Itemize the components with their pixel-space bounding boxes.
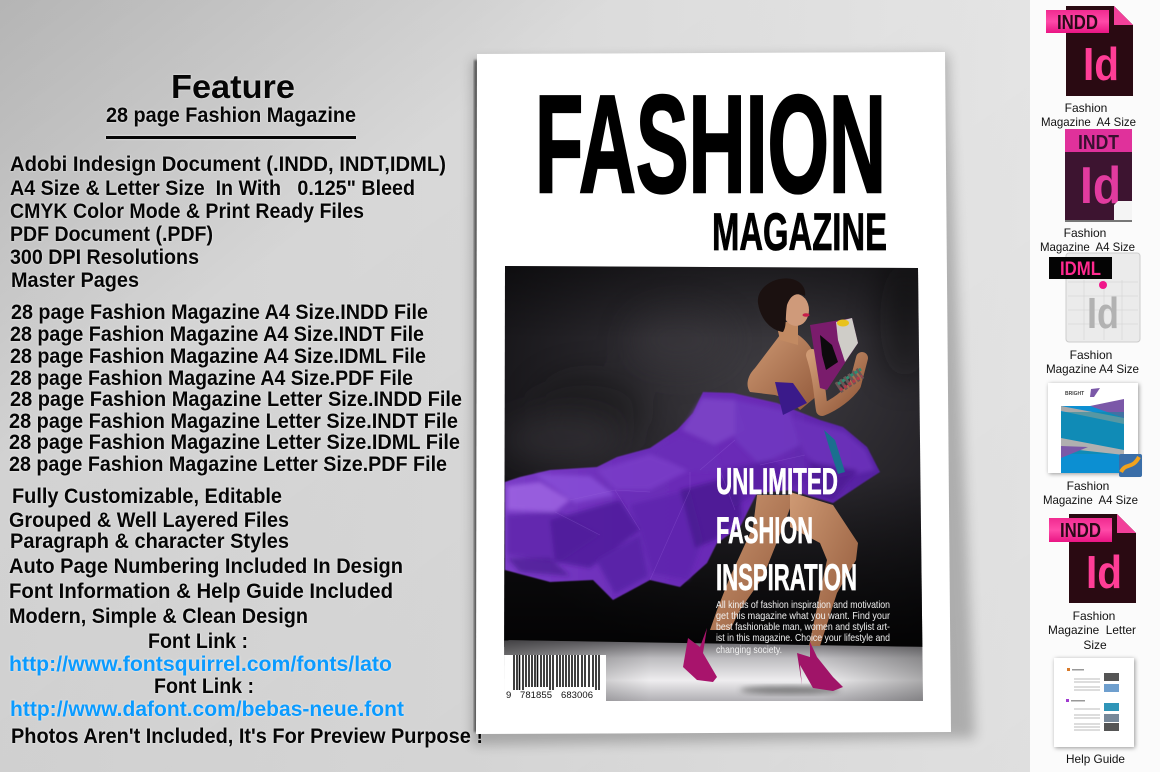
icon: INDD A4: Id bbox=[1083, 38, 1119, 90]
cover page bbox=[476, 52, 951, 734]
ruffle edge lines bbox=[555, 440, 805, 580]
front leg bbox=[790, 492, 858, 646]
cover photo bbox=[500, 260, 930, 705]
file list: 28 page Fashion Magazine A4 Size.INDD File bbox=[11, 301, 428, 324]
bracelet bbox=[838, 369, 862, 390]
preview note: Photos Aren't Included, It's For Preview Purpose ! bbox=[11, 725, 483, 748]
cover paragraph: ist in this magazine. Choice your lifestyle and bbox=[716, 632, 890, 644]
barcode: 781855 bbox=[520, 690, 552, 701]
front arm bbox=[812, 355, 862, 410]
front shoe bbox=[797, 642, 843, 691]
cover paragraph: get this magazine what you want. Find your bbox=[716, 610, 890, 622]
label: INDD A4 bbox=[1041, 101, 1136, 129]
file list: 28 page Fashion Magazine A4 Size.INDT File bbox=[10, 323, 424, 346]
icon: IDML: IDML bbox=[1060, 259, 1101, 280]
masthead: MAGAZINE: MAGAZINE bbox=[712, 203, 887, 262]
panel: file icons bbox=[1040, 6, 1142, 766]
cover headline: FASHION bbox=[716, 510, 813, 551]
label: INDT A4: Magazine A4 Size bbox=[1040, 240, 1135, 254]
format list: Master Pages bbox=[11, 269, 139, 292]
format list: PDF Document (.PDF) bbox=[10, 223, 213, 246]
rear shoe bbox=[683, 628, 717, 682]
label: INDD Letter: Fashion bbox=[1073, 609, 1115, 623]
label: IDML bbox=[1046, 348, 1139, 376]
cover paragraph: best fashionable man, women and stylist art- bbox=[716, 621, 890, 633]
icon: INDD Letter bbox=[1049, 514, 1136, 603]
label: INDD A4: Magazine A4 Size bbox=[1041, 115, 1136, 129]
masthead: FASHION: FASHION bbox=[535, 67, 886, 222]
file list: 28 page Fashion Magazine Letter Size.INDD File bbox=[10, 388, 462, 411]
cover paragraph: All kinds of fashion inspiration and motivation bbox=[716, 599, 890, 611]
feature list: Paragraph & character Styles bbox=[10, 530, 289, 553]
label: PDF: Fashion bbox=[1067, 479, 1109, 493]
icon: IDML: Id bbox=[1087, 289, 1119, 338]
icon: help guide thumbnail bbox=[1054, 658, 1134, 747]
icon: INDD A4 bbox=[1046, 6, 1133, 96]
label: IDML: Magazine A4 Size bbox=[1046, 362, 1139, 376]
corset bbox=[775, 382, 807, 415]
cover headline: INSPIRATION bbox=[716, 557, 857, 598]
vignette bbox=[500, 262, 930, 647]
label: INDD Letter bbox=[1048, 609, 1136, 652]
barcode: 683006 bbox=[561, 690, 593, 701]
icon: INDT A4: Id bbox=[1080, 157, 1121, 215]
subheading: 28 page Fashion Magazine bbox=[106, 104, 356, 127]
format list bbox=[10, 153, 446, 292]
feature list: Grouped & Well Layered Files bbox=[9, 509, 289, 532]
torso and rear arm bbox=[748, 334, 814, 410]
icon strip background bbox=[1030, 0, 1160, 772]
font links: http://www.fontsquirrel.com/fonts/lato bbox=[9, 653, 392, 676]
dress and train bbox=[505, 392, 880, 600]
label: INDD Letter: Size bbox=[1083, 638, 1107, 652]
feature list: Modern, Simple & Clean Design bbox=[9, 605, 308, 628]
label: INDT A4 bbox=[1040, 226, 1135, 254]
icon: IDML bbox=[1049, 253, 1140, 342]
barcode: 9 bbox=[506, 690, 511, 701]
rear leg bbox=[710, 495, 795, 630]
icon: PDF thumbnail bbox=[1048, 383, 1142, 477]
label: IDML: Fashion bbox=[1070, 348, 1112, 362]
cover paragraph bbox=[716, 599, 890, 656]
format list: Adobi Indesign Document (.INDD, INDT,IDML) bbox=[10, 153, 446, 176]
cover paragraph: changing society. bbox=[716, 644, 782, 656]
label: INDD Letter: Magazine Letter bbox=[1048, 623, 1136, 637]
icon: PDF thumbnail: BRIGHT bbox=[1065, 391, 1084, 397]
feature list: Font Information & Help Guide Included bbox=[9, 580, 393, 603]
file list: 28 page Fashion Magazine A4 Size.IDML File bbox=[10, 345, 426, 368]
label: INDT A4: Fashion bbox=[1064, 226, 1106, 240]
icon: INDT A4: INDT bbox=[1078, 132, 1119, 154]
format list: 300 DPI Resolutions bbox=[10, 246, 199, 269]
label: INDD A4: Fashion bbox=[1065, 101, 1107, 115]
format list: A4 Size & Letter Size In With 0.125" Bleed bbox=[10, 177, 415, 200]
cover headline bbox=[717, 468, 856, 591]
label: PDF bbox=[1043, 479, 1138, 507]
file list bbox=[9, 301, 462, 476]
hair bbox=[758, 278, 805, 332]
icon: INDD Letter: INDD bbox=[1060, 520, 1101, 542]
file list: 28 page Fashion Magazine A4 Size.PDF File bbox=[10, 367, 413, 390]
font links bbox=[9, 630, 404, 721]
label: PDF: Magazine A4 Size bbox=[1043, 493, 1138, 507]
format list: CMYK Color Mode & Print Ready Files bbox=[10, 200, 364, 223]
file list: 28 page Fashion Magazine Letter Size.INDT File bbox=[9, 410, 458, 433]
cover headline: UNLIMITED bbox=[716, 461, 838, 502]
font links: Font Link : bbox=[148, 630, 248, 653]
smoke bbox=[513, 268, 920, 459]
magazine shadow bbox=[472, 54, 975, 745]
floor bbox=[500, 640, 930, 705]
font links: Font Link : bbox=[154, 675, 254, 698]
head bbox=[783, 294, 809, 326]
font links: http://www.dafont.com/bebas-neue.font bbox=[10, 698, 404, 721]
panel: magazine cover bbox=[476, 52, 951, 734]
file list: 28 page Fashion Magazine Letter Size.PDF File bbox=[9, 453, 447, 476]
studio backdrop bbox=[500, 262, 930, 647]
floor shadow bbox=[740, 686, 840, 694]
tulle ruffles bbox=[507, 398, 875, 594]
model bbox=[505, 278, 880, 691]
barcode bbox=[504, 655, 606, 701]
file list: 28 page Fashion Magazine Letter Size.IDML File bbox=[9, 431, 460, 454]
neck bbox=[776, 322, 798, 345]
feature list: Fully Customizable, Editable bbox=[12, 485, 282, 508]
feature list bbox=[9, 485, 403, 628]
icon: INDD A4: INDD bbox=[1057, 12, 1098, 34]
icon: INDD Letter: Id bbox=[1086, 546, 1122, 598]
clutch bag bbox=[810, 318, 858, 390]
heading: Feature: Feature bbox=[171, 68, 295, 105]
lips bbox=[802, 313, 810, 317]
feature list: Auto Page Numbering Included In Design bbox=[9, 555, 403, 578]
icon: INDT A4 bbox=[1065, 129, 1132, 222]
blue ribbon bbox=[824, 430, 845, 474]
panel: feature text list bbox=[9, 68, 483, 748]
heading rule bbox=[106, 136, 356, 139]
label: help guide: Help Guide bbox=[1066, 752, 1125, 766]
